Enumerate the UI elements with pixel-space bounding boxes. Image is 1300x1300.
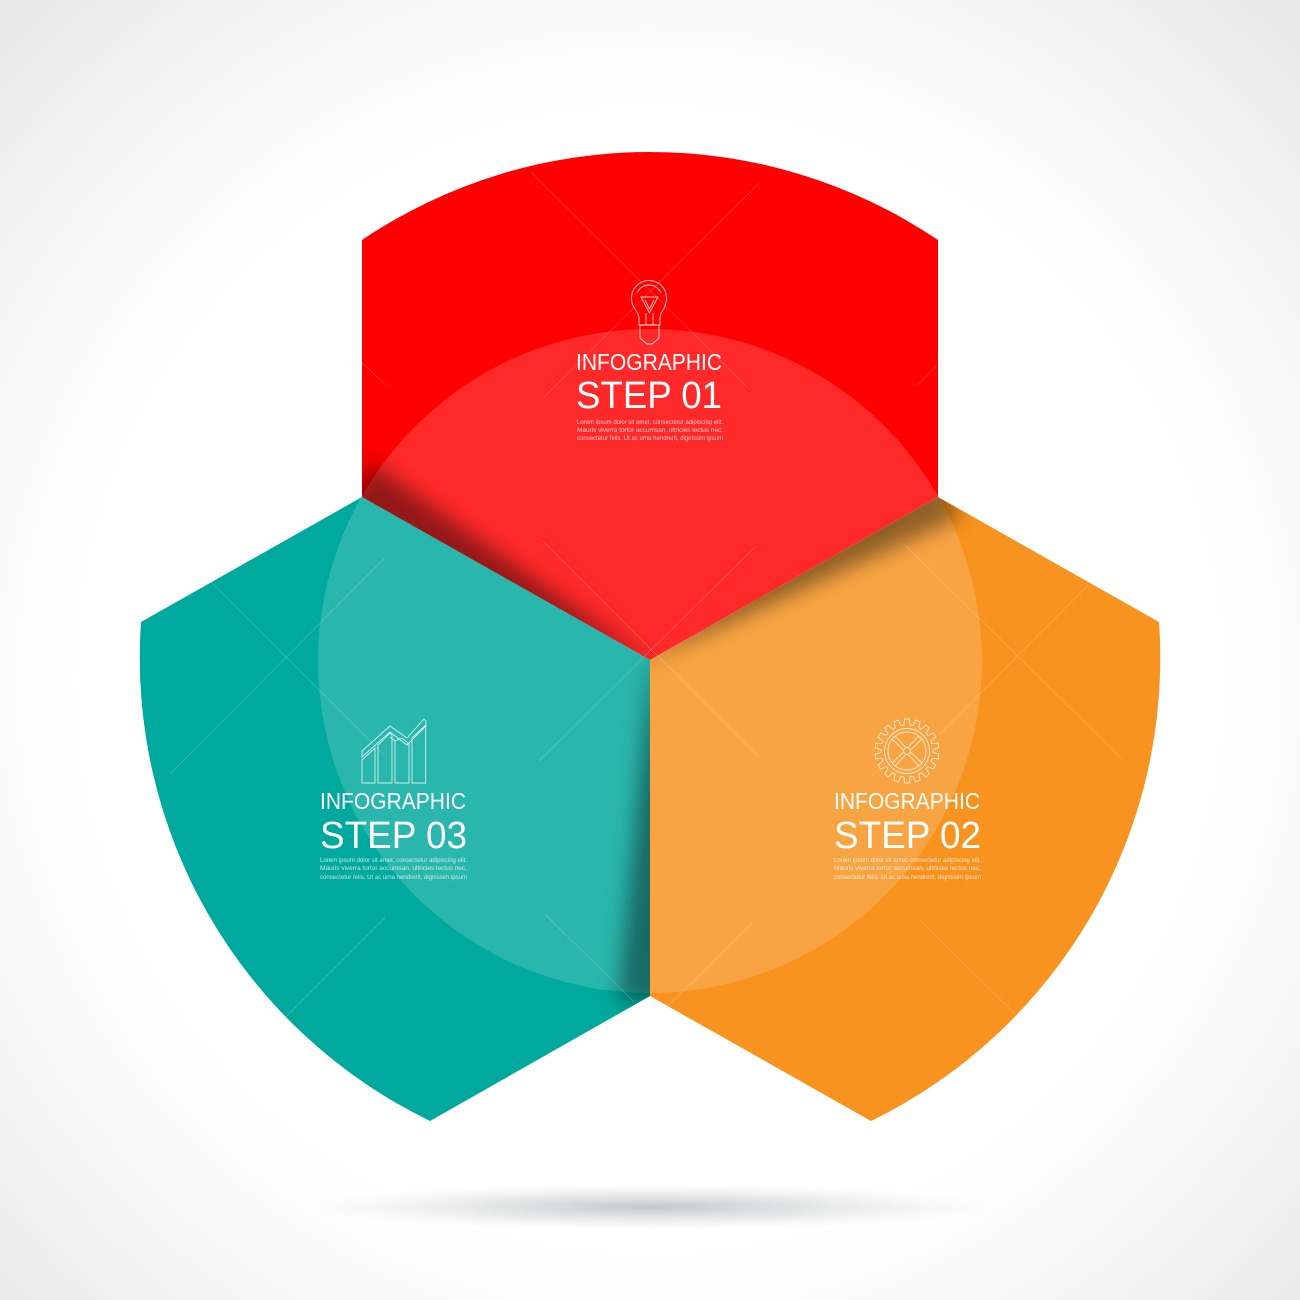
text block: step 03: [320, 857, 467, 881]
heading: step 01: [576, 349, 722, 417]
icon: gear: [875, 719, 939, 783]
red shield shape: [362, 152, 938, 660]
heading: step 02: INFOGRAPHIC: [834, 788, 980, 814]
heading: step 03: INFOGRAPHIC: [320, 788, 466, 814]
shadow: on orange panel: [650, 497, 970, 666]
panel: step 01 red: [362, 152, 938, 660]
text block: step 02: Mauris viverra tortor accumsan, ultricies lectus nec,: [834, 865, 981, 872]
text block: step 02: [834, 857, 981, 881]
heading: step 01: STEP 01: [576, 375, 722, 417]
teal shield shape: [140, 497, 650, 1121]
text block: step 02: consectetur felis. Ut ac urna hendrerit, dignissim ipsum: [834, 874, 981, 881]
text block: step 03: Lorem ipsum dolor sit amet, consectetur adipiscing elit.: [320, 857, 467, 864]
heading: step 02: STEP 02: [834, 815, 981, 857]
shadow: on red panel: [362, 454, 654, 660]
ground shadow: [310, 1184, 990, 1230]
heading: step 03: STEP 03: [320, 815, 467, 857]
icon: bar chart: [362, 719, 426, 783]
text block: step 01: Mauris viverra tortor accumsan, ultricies lectus nec,: [577, 427, 723, 434]
text block: step 02: Lorem ipsum dolor sit amet, consectetur adipiscing elit.: [834, 857, 981, 864]
text block: step 01: consectetur felis. Ut ac urna hendrerit, dignissim ipsum: [577, 435, 723, 442]
orange shield shape: [650, 497, 1160, 1121]
shadow: on teal panel: [608, 660, 650, 1011]
text block: step 03: consectetur felis. Ut ac urna hendrerit, dignissim ipsum: [320, 874, 467, 881]
text block: step 01: Lorem ipsum dolor sit amet, consectetur adipiscing elit.: [577, 419, 723, 426]
heading: step 01: INFOGRAPHIC: [576, 349, 722, 375]
icon: light bulb: [632, 280, 666, 344]
central translucent circle: [318, 329, 982, 993]
panel: step 02 orange: [650, 497, 1160, 1121]
text block: step 01: [577, 419, 723, 442]
heading: step 03: [320, 788, 467, 857]
heading: step 02: [834, 788, 981, 857]
text block: step 03: Mauris viverra tortor accumsan, ultricies lectus nec,: [320, 865, 467, 872]
panel: step 03 teal: [140, 497, 650, 1121]
